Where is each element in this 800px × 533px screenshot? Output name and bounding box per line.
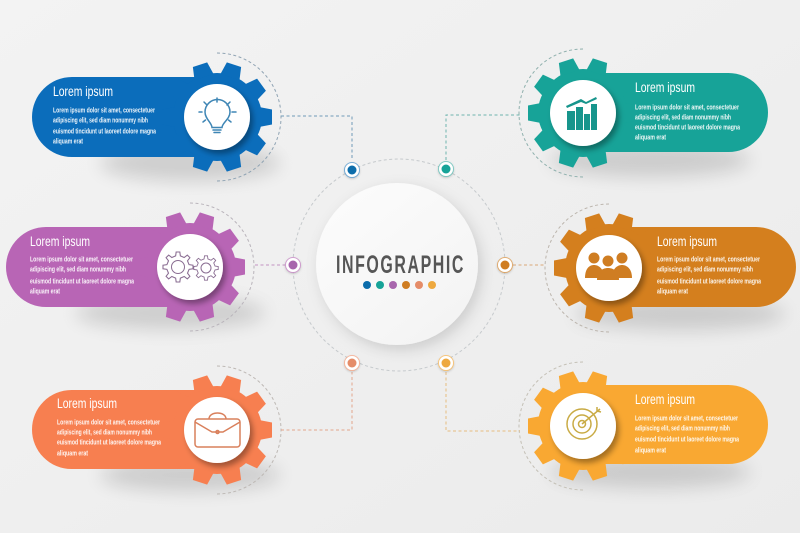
gear: [162, 375, 272, 485]
gear: [528, 371, 638, 481]
heading: Lorem ipsum: [30, 233, 90, 249]
body text: euismod tincidunt ut laoreet dolore magna: [57, 440, 161, 446]
body text: aliquam erat: [30, 288, 60, 296]
connector: [446, 115, 520, 160]
pill: [6, 227, 236, 307]
body text: adipiscing elit, sed diam nonummy nibh: [57, 430, 152, 436]
body text: aliquam erat: [657, 288, 688, 296]
pill: [538, 385, 768, 464]
center hub: [293, 159, 505, 371]
connector: [446, 372, 520, 431]
body text: Lorem ipsum dolor sit amet, consectetuer: [57, 420, 160, 426]
pill: [32, 77, 262, 157]
node: [438, 356, 454, 370]
body text: adipiscing elit, sed diam nonummy nibh: [657, 266, 753, 274]
icon disc: [184, 397, 250, 463]
panel: yellow: [438, 356, 768, 490]
icon: bar chart: [566, 97, 597, 130]
body text: [30, 256, 134, 296]
connector: [281, 372, 352, 430]
icon: people: [585, 252, 632, 280]
dashed arc: [519, 49, 583, 177]
dashed arc: [545, 204, 609, 332]
body text: aliquam erat: [635, 134, 666, 142]
gear: [554, 213, 664, 323]
dashed arc: [519, 362, 583, 490]
icon: cogs: [163, 252, 218, 282]
icon disc: [550, 80, 616, 146]
dashed arc: [217, 366, 281, 494]
body text: [57, 420, 161, 458]
heading: Lorem ipsum: [57, 395, 117, 411]
icon disc: [157, 234, 223, 300]
body text: aliquam erat: [53, 138, 83, 146]
body text: euismod tincidunt ut laoreet dolore magna: [30, 278, 134, 286]
connector: [255, 264, 285, 266]
pill: [566, 227, 796, 307]
body text: Lorem ipsum dolor sit amet, consectetuer: [635, 416, 738, 422]
node: [438, 162, 454, 176]
body text: adipiscing elit, sed diam nonummy nibh: [635, 114, 731, 122]
body text: adipiscing elit, sed diam nonummy nibh: [53, 118, 148, 124]
heading: Lorem ipsum: [53, 83, 113, 99]
colour dots: [363, 281, 436, 289]
pill: [538, 73, 768, 152]
connector: [281, 116, 352, 160]
heading: Lorem ipsum: [635, 79, 695, 95]
body text: euismod tincidunt ut laoreet dolore magna: [635, 124, 740, 132]
icon: light bulb: [199, 98, 236, 132]
body text: aliquam erat: [57, 450, 88, 458]
body text: adipiscing elit, sed diam nonummy nibh: [635, 426, 730, 432]
panel: orange: [498, 204, 796, 332]
body text: aliquam erat: [635, 448, 666, 454]
body text: Lorem ipsum dolor sit amet, consectetuer: [635, 104, 739, 112]
body text: euismod tincidunt ut laoreet dolore magna: [635, 436, 739, 444]
icon disc: [576, 235, 642, 301]
pill: [32, 390, 262, 469]
panel: teal: [438, 49, 768, 177]
panel: purple: [6, 203, 300, 331]
icon: target: [567, 407, 601, 439]
icon disc: [550, 393, 616, 459]
dashed arc: [217, 53, 281, 181]
central disc: [316, 183, 478, 345]
body text: Lorem ipsum dolor sit amet, consectetuer: [53, 108, 155, 114]
body text: [635, 104, 740, 142]
panel: blue: [32, 53, 360, 181]
body text: euismod tincidunt ut laoreet dolore magna: [657, 278, 761, 286]
node: [344, 162, 360, 178]
body text: [635, 416, 739, 454]
heading: Lorem ipsum: [657, 233, 717, 249]
body text: Lorem ipsum dolor sit amet, consectetuer: [30, 256, 133, 264]
icon: briefcase: [195, 413, 240, 447]
connector: [513, 264, 545, 266]
body text: [657, 256, 761, 296]
body text: [53, 108, 156, 146]
node: [498, 258, 512, 272]
gear: [162, 62, 272, 172]
body text: adipiscing elit, sed diam nonummy nibh: [30, 266, 126, 274]
icon disc: [184, 84, 250, 150]
heading: Lorem ipsum: [635, 391, 695, 407]
dashed ring: [293, 159, 505, 371]
dashed arc: [190, 203, 254, 331]
gear: [135, 212, 245, 322]
panel: coral: [32, 356, 360, 494]
body text: euismod tincidunt ut laoreet dolore magna: [53, 128, 156, 136]
title: INFOGRAPHIC: [336, 251, 465, 279]
node: [344, 356, 360, 370]
node: [286, 258, 300, 272]
gear: [528, 58, 638, 168]
body text: Lorem ipsum dolor sit amet, consectetuer: [657, 256, 760, 264]
